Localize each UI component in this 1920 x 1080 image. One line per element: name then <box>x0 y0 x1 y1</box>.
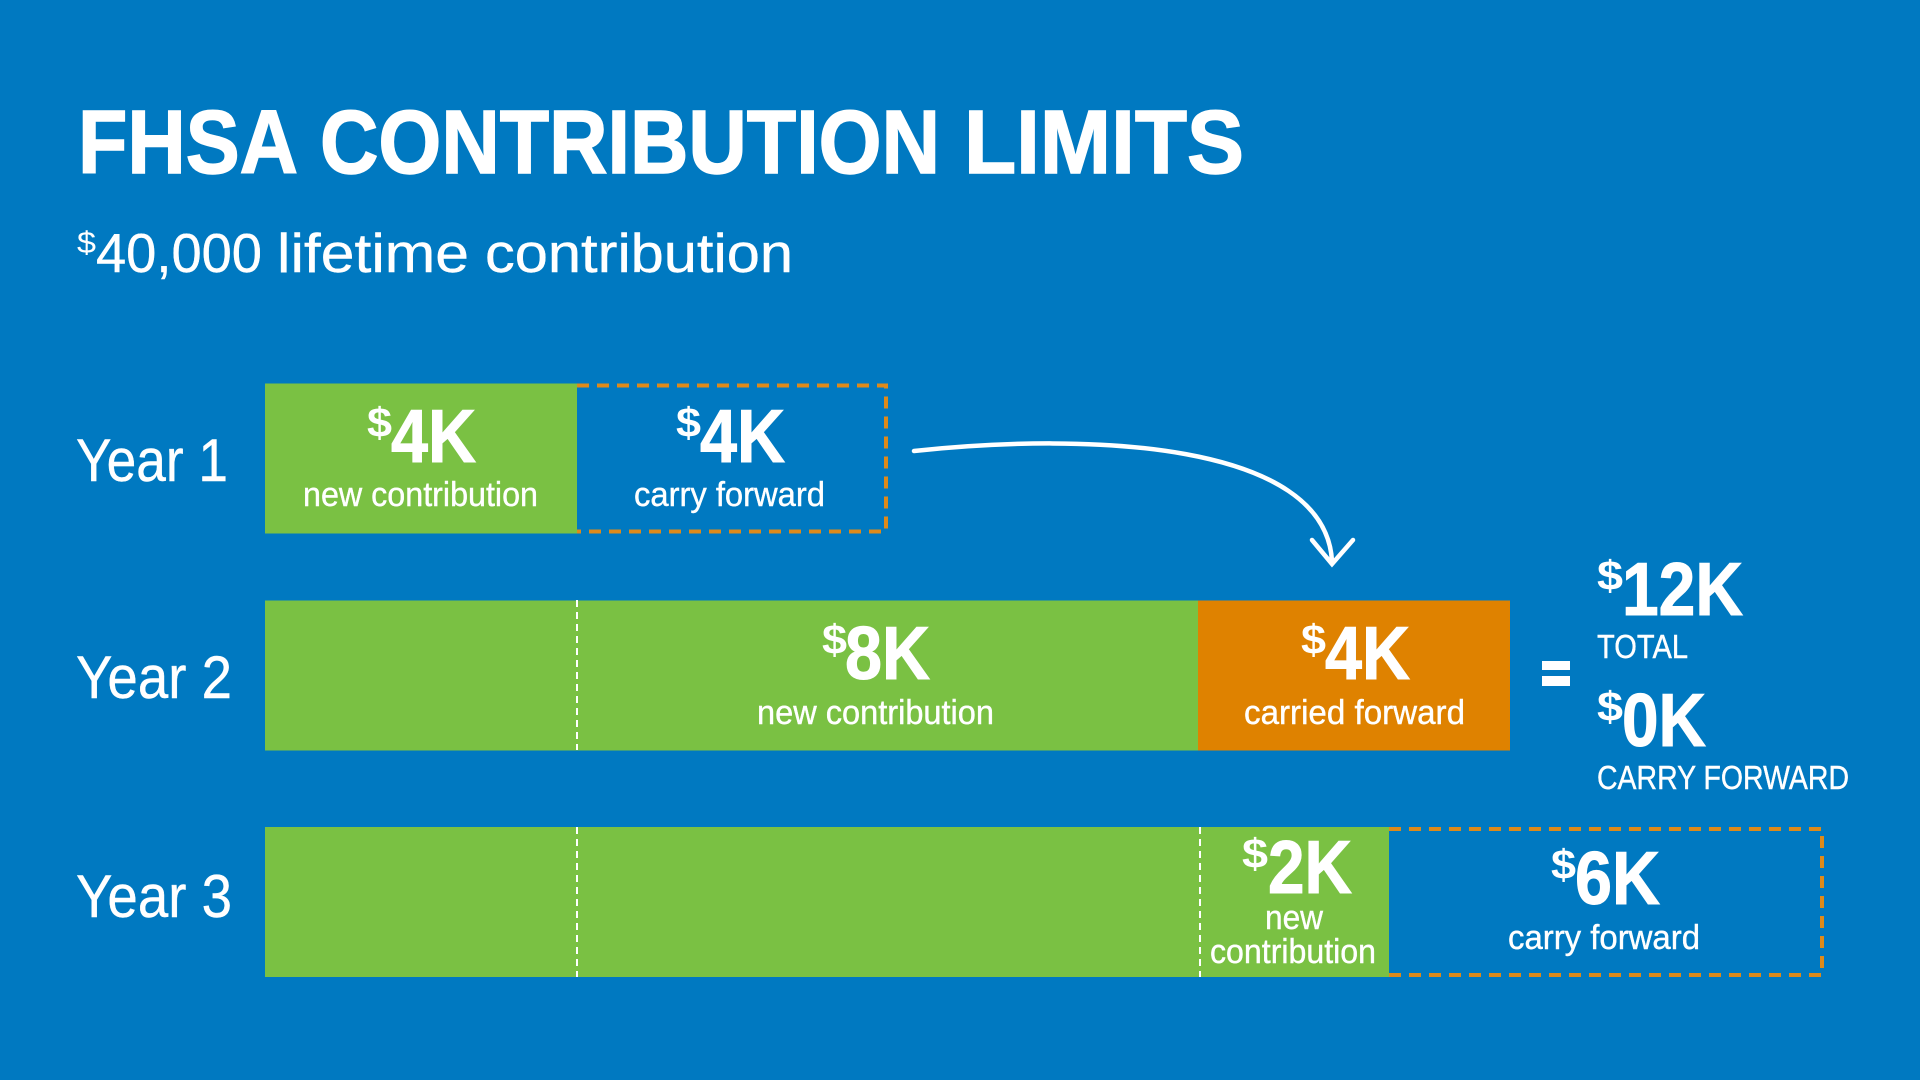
equals sign <box>1542 661 1570 686</box>
carry forward amount: 0K <box>1622 678 1706 762</box>
subtitle <box>77 222 793 284</box>
year 1 new contribution label: new contribution <box>303 476 538 514</box>
year 2 carried forward block <box>1198 600 1510 750</box>
year 3 new contribution block <box>265 827 1389 977</box>
carry forward amount <box>1597 678 1706 762</box>
total amount: $ <box>1597 552 1623 599</box>
panel: year 3 bar <box>265 825 1822 977</box>
year 2 carried forward amount: $ <box>1301 616 1326 663</box>
title <box>78 93 1244 193</box>
year 3 new contribution label <box>1210 899 1376 971</box>
year 1 new contribution amount: 4K <box>391 394 476 478</box>
carry forward label: CARRY FORWARD <box>1597 759 1849 796</box>
year 2 carried forward amount: 4K <box>1325 611 1410 695</box>
year 1 carry forward label: carry forward <box>634 476 825 514</box>
title: CONTRIBUTION <box>320 93 940 193</box>
year 3 carry forward amount: $ <box>1551 841 1576 888</box>
year 3 new contribution amount: $ <box>1242 830 1268 877</box>
year 2 new contribution amount: 8K <box>845 611 930 695</box>
year 3 new contribution amount <box>1242 825 1352 909</box>
year 3 new contribution label: new <box>1265 899 1323 937</box>
subtitle: lifetime <box>277 222 469 284</box>
year 1 new contribution block <box>265 384 577 534</box>
title: FHSA <box>78 93 298 193</box>
arrow: carry forward to year 2 <box>914 443 1353 564</box>
subtitle: 40,000 <box>96 222 262 284</box>
year 2 carried forward label: carried forward <box>1244 694 1465 732</box>
year 3 new contribution label: contribution <box>1210 933 1376 971</box>
carry forward amount: $ <box>1597 683 1623 730</box>
total label: TOTAL <box>1597 628 1688 665</box>
year 1 carry forward amount: $ <box>676 399 701 446</box>
year 3 carry forward dashed outline <box>1389 829 1822 975</box>
year 1 carry forward dashed outline <box>577 386 886 532</box>
year 3 new contribution amount: 2K <box>1268 825 1352 909</box>
subtitle: contribution <box>485 222 793 284</box>
year 2 new contribution block <box>265 600 1198 750</box>
row label: year 1: Year 1 <box>76 427 228 494</box>
title: LIMITS <box>964 93 1244 193</box>
panel: year 2 bar <box>265 600 1510 750</box>
row label: year 3: Year 3 <box>76 863 232 930</box>
year 1 new contribution amount: $ <box>367 399 392 446</box>
total amount: 12K <box>1622 547 1743 631</box>
row label: year 2: Year 2 <box>76 644 232 711</box>
year 2 new contribution amount: $ <box>822 616 847 663</box>
year 1 carry forward amount: 4K <box>700 394 785 478</box>
subtitle: $ <box>77 225 96 260</box>
year 3 carry forward amount: 6K <box>1575 836 1660 920</box>
year 2 new contribution label: new contribution <box>757 694 994 732</box>
panel: year 1 bar <box>265 384 886 534</box>
year 3 carry forward label: carry forward <box>1508 919 1700 957</box>
